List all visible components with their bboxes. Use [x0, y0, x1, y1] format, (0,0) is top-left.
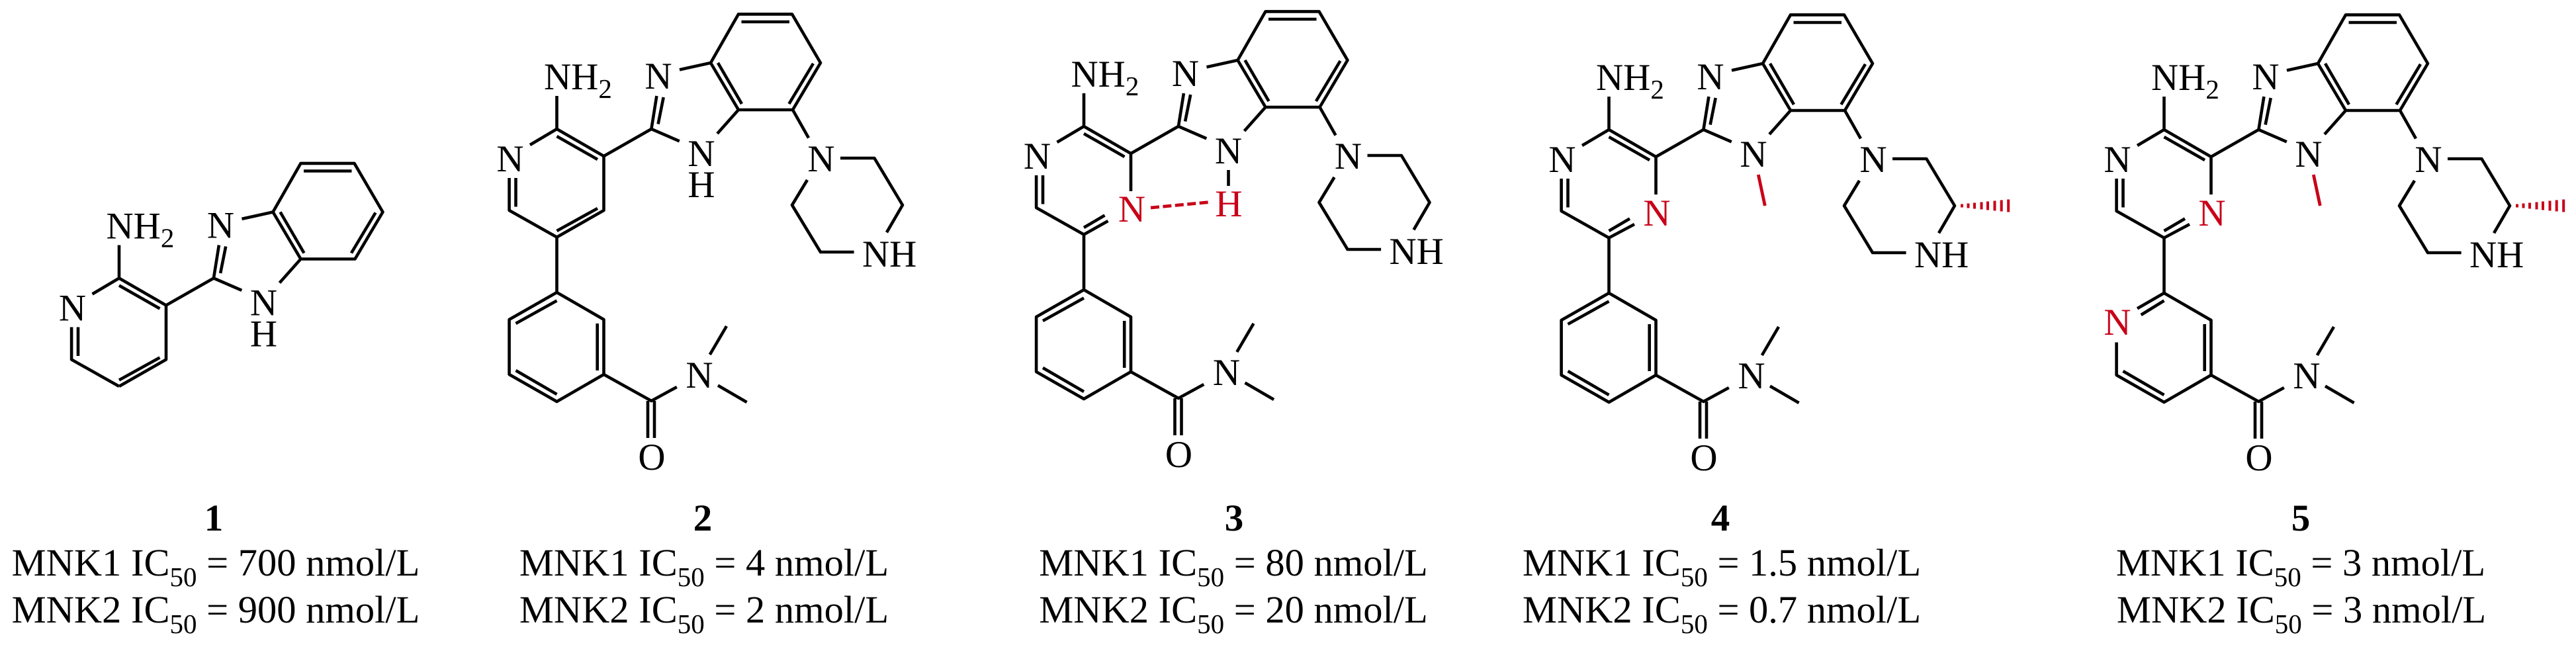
hydrogen bond	[1151, 202, 1208, 208]
atom labels: compound 5: N	[2252, 56, 2280, 98]
atom labels: compound 1: N	[207, 205, 234, 246]
bonds: compound 5	[2117, 15, 2510, 439]
atom labels: compound 4	[1548, 56, 1969, 479]
atom labels: compound 3: N	[1118, 189, 1145, 230]
caption: compound 1: 1	[204, 497, 223, 539]
atom labels: compound 2: N	[686, 355, 713, 396]
caption: compound 3: 50	[1197, 562, 1224, 592]
bonds: compound 4	[1562, 15, 1955, 439]
compound 2 structure	[496, 14, 916, 478]
atom labels: compound 5: N	[2415, 139, 2442, 181]
atom labels: compound 5: N	[2104, 302, 2131, 343]
bonds: compound 1	[71, 163, 382, 386]
caption: compound 5	[2116, 497, 2486, 639]
atom labels: compound 3: N	[1213, 352, 1240, 394]
atom labels: compound 3: O	[1165, 434, 1192, 476]
caption: compound 2: 2	[693, 497, 712, 539]
atom labels: compound 1	[59, 205, 277, 355]
atom labels: compound 5: N	[2104, 139, 2131, 181]
caption: compound 3: MNK2 IC	[1039, 588, 1197, 631]
atom labels: compound 4: N	[1859, 139, 1887, 181]
atom labels: compound 4: N	[1740, 134, 1767, 175]
caption: compound 4: MNK1 IC	[1523, 541, 1681, 584]
caption: compound 4	[1523, 497, 1921, 639]
caption: compound 4: 4	[1711, 497, 1730, 539]
compound 4 structure	[1548, 15, 2008, 479]
atom labels: compound 3: H	[1215, 183, 1243, 225]
caption: compound 5: 5	[2291, 497, 2310, 539]
atom labels: compound 5: N	[2293, 355, 2321, 397]
atom labels: compound 2: 2	[598, 73, 612, 104]
caption: compound 3: MNK1 IC	[1039, 541, 1197, 584]
caption: compound 2: 50	[678, 562, 705, 592]
atom labels: compound 3	[1024, 53, 1444, 476]
atom labels: compound 2: N	[644, 56, 672, 97]
caption: compound 3: 50	[1197, 609, 1224, 639]
atom labels: compound 5: NH	[2469, 234, 2524, 276]
red hashed methyl wedge	[1962, 200, 2008, 212]
caption: compound 4: 50	[1681, 562, 1708, 592]
atom labels: compound 1: H	[250, 314, 277, 355]
bonds: compound 2	[510, 14, 903, 438]
caption: compound 1: MNK2 IC	[12, 588, 170, 631]
caption: compound 1	[12, 497, 420, 639]
atom labels: compound 1: NH	[106, 205, 161, 247]
atom labels: compound 4: N	[1697, 56, 1724, 98]
atom labels: compound 2: NH	[862, 234, 916, 275]
red N-methyl bond	[2313, 175, 2320, 206]
caption: compound 1: = 700 nmol/L	[197, 541, 420, 584]
atom labels: compound 5: NH	[2151, 57, 2205, 99]
atom labels: compound 5: N	[2198, 193, 2226, 234]
atom labels: compound 2	[496, 56, 916, 478]
atom labels: compound 4: NH	[1914, 234, 1969, 276]
caption: compound 5: 50	[2275, 609, 2302, 639]
caption: compound 4: MNK2 IC	[1523, 588, 1681, 631]
caption: compound 1: MNK1 IC	[12, 541, 170, 584]
atom labels: compound 2: H	[688, 164, 715, 206]
atom labels: compound 5: O	[2245, 437, 2273, 479]
atom labels: compound 2: N	[807, 138, 835, 180]
caption: compound 4: = 1.5 nmol/L	[1708, 541, 1921, 584]
caption: compound 5: 50	[2274, 562, 2301, 592]
caption: compound 5: MNK1 IC	[2116, 541, 2274, 584]
atom labels: compound 3: 2	[1126, 71, 1139, 101]
caption: compound 4: = 0.7 nmol/L	[1708, 588, 1921, 631]
caption: compound 3	[1039, 497, 1428, 639]
atom labels: compound 4: O	[1690, 437, 1718, 479]
atom labels: compound 3: N	[1215, 130, 1242, 172]
atom labels: compound 4: N	[1548, 139, 1576, 181]
caption: compound 3: = 20 nmol/L	[1224, 588, 1428, 631]
atom labels: compound 1: N	[59, 287, 86, 329]
caption: compound 2: MNK2 IC	[519, 588, 678, 631]
atom labels: compound 3: N	[1024, 136, 1051, 177]
atom labels: compound 4: N	[1643, 193, 1671, 234]
atom labels: compound 3: NH	[1071, 54, 1126, 95]
atom labels: compound 3: N	[1335, 136, 1362, 177]
atom labels: compound 4: 2	[1650, 74, 1664, 105]
atom labels: compound 2: N	[688, 133, 715, 175]
red N-methyl bond	[1758, 175, 1765, 206]
atom labels: compound 5: N	[2295, 134, 2323, 175]
atom labels: compound 5	[2104, 56, 2524, 479]
caption: compound 5: = 3 nmol/L	[2302, 588, 2486, 631]
atom labels: compound 2: O	[638, 437, 666, 478]
caption: compound 3: = 80 nmol/L	[1224, 541, 1428, 584]
caption: compound 2: MNK1 IC	[519, 541, 678, 584]
compound 5 structure	[2104, 15, 2563, 479]
caption: compound 2: = 4 nmol/L	[705, 541, 889, 584]
atom labels: compound 3: NH	[1390, 231, 1444, 273]
atom labels: compound 3: N	[1172, 53, 1199, 95]
caption: compound 4: 50	[1681, 609, 1708, 639]
caption: compound 2: 50	[678, 609, 705, 639]
caption: compound 5: = 3 nmol/L	[2301, 541, 2485, 584]
caption: compound 1: = 900 nmol/L	[197, 588, 420, 631]
caption: compound 1: 50	[170, 562, 197, 592]
compound 1 structure	[59, 163, 382, 386]
bonds: compound 3	[1036, 11, 1429, 435]
caption: compound 2	[519, 497, 889, 639]
atom labels: compound 1: N	[250, 282, 277, 324]
atom labels: compound 2: N	[496, 138, 524, 180]
atom labels: compound 4: NH	[1596, 57, 1650, 99]
atom labels: compound 5: 2	[2205, 74, 2219, 105]
atom labels: compound 4: N	[1738, 355, 1765, 397]
caption: compound 1: 50	[170, 609, 197, 639]
caption: compound 5: MNK2 IC	[2117, 588, 2275, 631]
red hashed methyl wedge	[2517, 200, 2563, 212]
atom labels: compound 2: NH	[544, 56, 598, 98]
compound 3 structure	[1024, 11, 1444, 476]
caption: compound 2: = 2 nmol/L	[705, 588, 889, 631]
atom labels: compound 1: 2	[161, 222, 174, 253]
caption: compound 3: 3	[1225, 497, 1243, 539]
